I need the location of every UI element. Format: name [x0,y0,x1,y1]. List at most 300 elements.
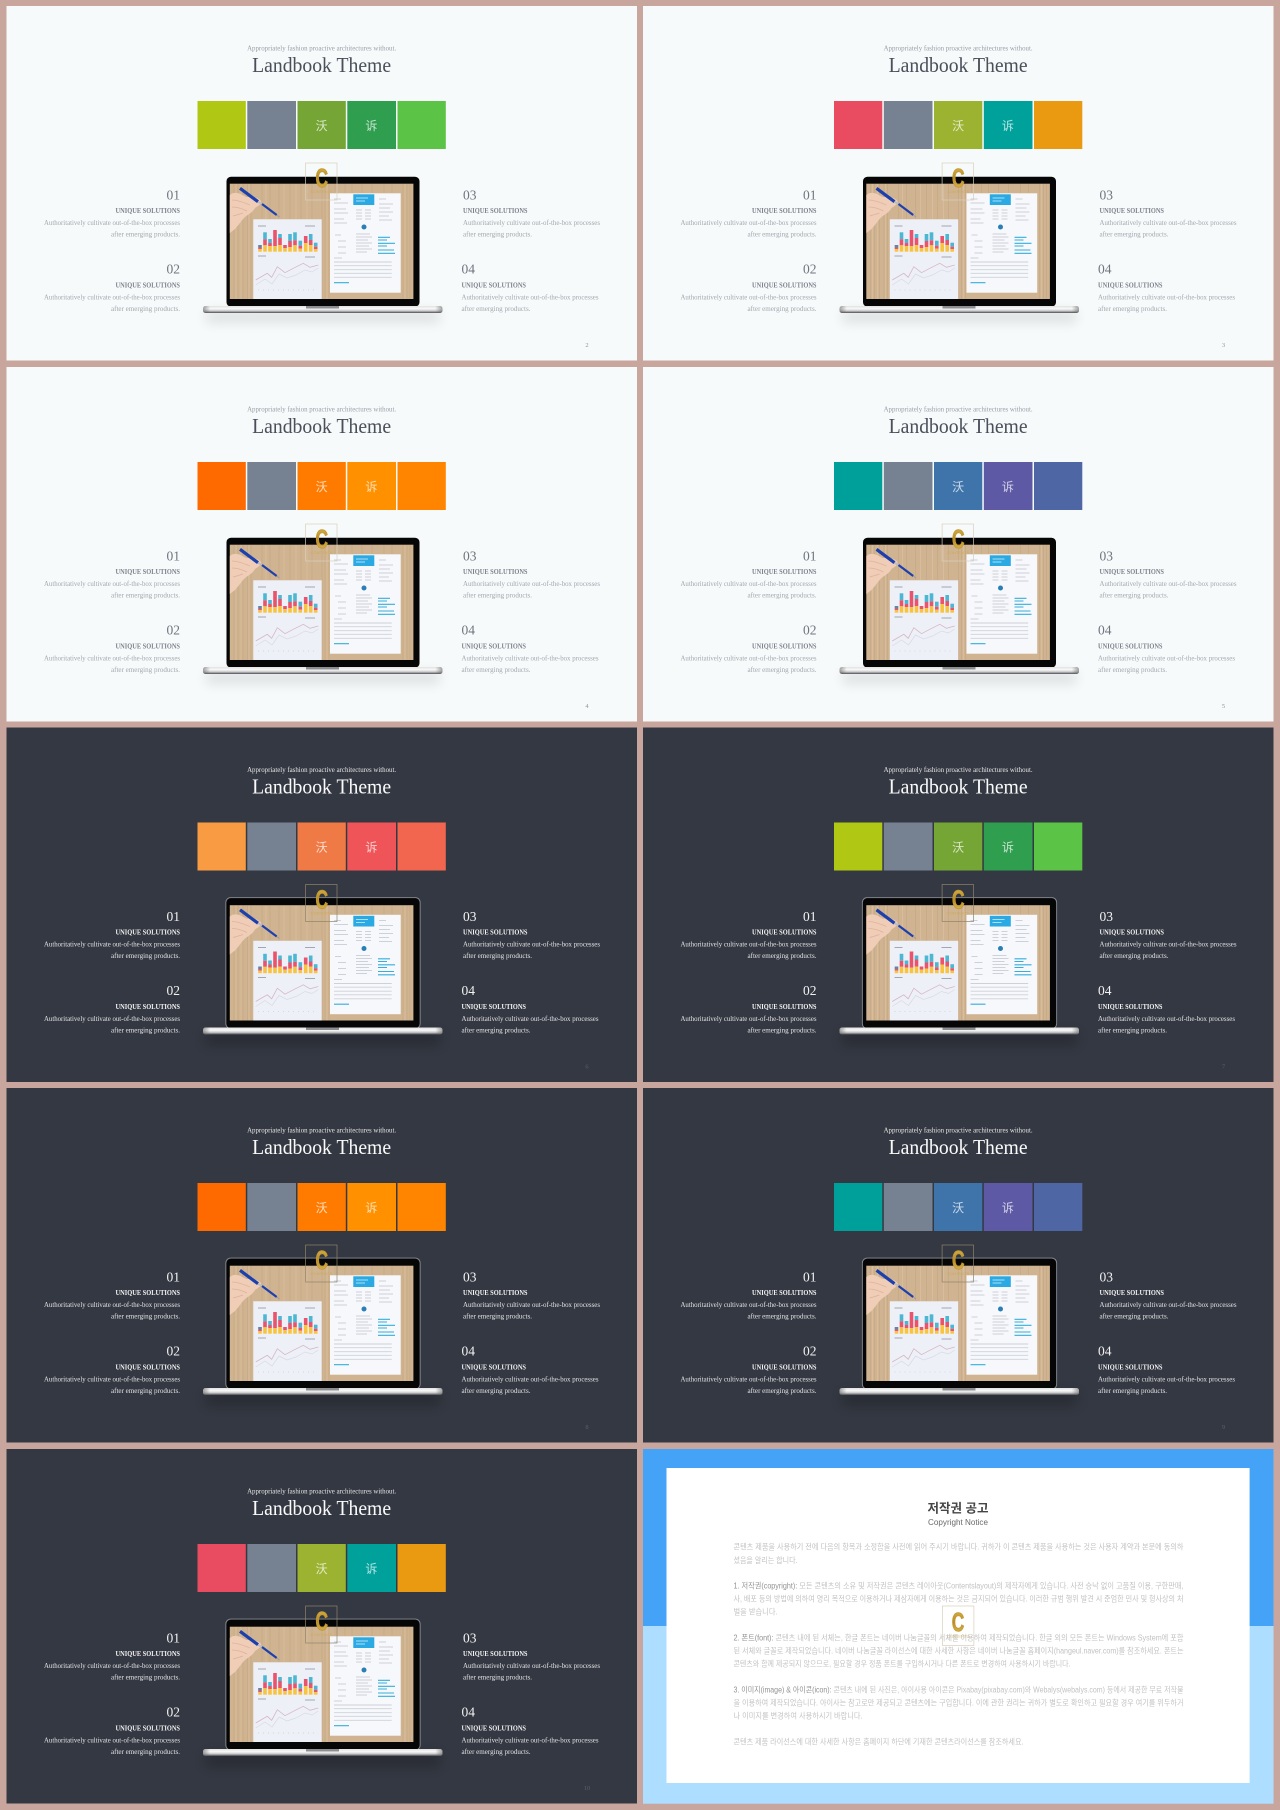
slide background [643,1088,1274,1442]
text block 01 [44,187,180,238]
text block 01: 01 [803,187,816,202]
text block 01: 01 [166,548,180,563]
text block 04: Authoritatively cultivate out-of-the-box processes [462,1375,599,1383]
text block 04: Authoritatively cultivate out-of-the-box processes [1098,1015,1235,1023]
text block 04: UNIQUE SOLUTIONS [462,1003,526,1011]
text block 01 [44,1269,180,1320]
text block 01: UNIQUE SOLUTIONS [752,928,817,936]
panel: slide 9 teal dark [643,1088,1274,1442]
slide background [643,367,1274,722]
watermark logo: CONTENTS [947,1271,969,1276]
text block 04: Authoritatively cultivate out-of-the-box processes [462,1015,599,1023]
text block 01: Authoritatively cultivate out-of-the-box processes [44,1662,180,1670]
slide background [643,6,1274,360]
color swatches [198,462,446,510]
watermark logo [306,163,337,200]
license note: 콘텐츠 제품 라이선스에 대한 사세한 사항은 홈페이지 하단에 기재한 콘텐츠라이선스를 참조하세요. [734,1737,1024,1747]
text block 02: after emerging products. [111,305,180,313]
text block 02: after emerging products. [111,666,180,674]
text block 02: after emerging products. [748,1026,817,1034]
color swatches: 沃 [952,119,964,133]
text block 02 [44,261,180,313]
text block 02: Authoritatively cultivate out-of-the-box processes [44,1736,180,1744]
color swatches: 沃 [316,840,328,854]
page number: 5 [1222,703,1225,710]
text block 01: UNIQUE SOLUTIONS [116,1650,180,1658]
text block 04 [462,1343,599,1395]
clause 3 image and icon: 나 이미지를 변경하여 사용하시기 바랍니다. [734,1711,862,1721]
watermark logo [306,884,337,922]
text block 01: 01 [166,1630,180,1645]
text block 01 [44,548,180,600]
text block 02: 02 [803,622,816,637]
intro paragraph: 콘텐츠 제품을 사용하기 전에 다음의 항목과 소정함을 사전에 읽어 주시기 바랍니다. 귀하가 이 콘텐츠 제품을 사용하는 것은 사용자 계약과 본문에 동의하 [734,1542,1184,1552]
text block 04: after emerging products. [1098,1387,1167,1395]
panel: copyright notice [643,1449,1274,1804]
text block 04: after emerging products. [1098,1026,1167,1034]
color swatches: 沃 [952,1201,964,1215]
text block 04 [462,622,599,674]
text block 01: 01 [166,187,180,202]
text block 03: 03 [463,1269,477,1284]
clause 2 font [734,1633,1184,1668]
watermark logo: CONTENTS [311,550,333,555]
color swatches: 诉 [1002,119,1014,133]
white notice card [666,1468,1250,1783]
text block 03: Authoritatively cultivate out-of-the-box processes [1100,1301,1237,1309]
text block 02: Authoritatively cultivate out-of-the-box processes [680,293,817,301]
page number: 6 [585,1064,589,1070]
text block 03: after emerging products. [463,1674,532,1682]
watermark logo [306,524,337,561]
text block 04: UNIQUE SOLUTIONS [462,642,526,650]
text block 01: Authoritatively cultivate out-of-the-box processes [44,940,180,948]
text block 04 [1098,622,1235,674]
notice heading: 저작권 공고 [928,1500,988,1516]
watermark logo: CONTENTS [311,189,333,194]
panel: slide 7 green dark [643,728,1274,1082]
text block 01: Authoritatively cultivate out-of-the-box processes [680,219,817,227]
clause 2 font: 2. 폰트(font): 콘텐츠 내에 된 서체는, 한글 폰트는 네이버 나눔글꼴의 서체를 이용하여 제작되었습니다. 한글 외의 모든 폰트는 Windows System에 포함 [734,1633,1184,1643]
color swatches [198,1183,446,1231]
watermark logo: CONTENTS [311,910,333,916]
text block 03 [1100,909,1237,960]
subtitle: Appropriately fashion proactive architectures without. [247,765,396,774]
text block 04: UNIQUE SOLUTIONS [1098,281,1163,289]
slide background [6,1449,637,1804]
clause 1 copyright: 사, 배포 등의 방법에 의하여 영리 목적으로 이용하거나 제삼자에게 이용하는 것은 금지되어 있습니다. 이러한 규범 행위 발견 시 준엄한 민사 및 형사상의 처 [734,1593,1184,1603]
watermark logo: C [952,1607,964,1637]
text block 03: UNIQUE SOLUTIONS [463,928,528,936]
laptop mockup [840,177,1079,323]
text block 02 [680,261,817,313]
panel: slide 4 orange light [6,367,637,722]
text block 03: after emerging products. [1100,1312,1169,1320]
text block 02 [680,622,817,674]
text block 03: 03 [463,548,477,563]
clause 3 image and icon [734,1684,1184,1721]
color swatches [834,101,1082,149]
text block 03: 03 [463,187,477,202]
laptop mockup [203,898,442,1044]
text block 02: after emerging products. [111,1026,180,1034]
text block 04: 04 [462,261,475,276]
text block 04: after emerging products. [462,1026,531,1034]
text block 02: UNIQUE SOLUTIONS [116,1724,180,1732]
watermark logo [942,524,974,561]
text block 04: Authoritatively cultivate out-of-the-box processes [462,1736,599,1744]
text block 01: after emerging products. [748,592,817,600]
watermark logo [942,1606,974,1646]
color swatches: 沃 [316,480,328,494]
clause 1 copyright [734,1581,1184,1617]
text block 04: 04 [462,1704,475,1719]
text block 02: UNIQUE SOLUTIONS [116,281,180,289]
text block 04: 04 [1098,622,1112,637]
text block 01: after emerging products. [748,952,817,960]
color swatches: 沃 [316,119,328,133]
text block 04: after emerging products. [462,305,531,313]
text block 04: 04 [462,622,475,637]
title: Landbook Theme [252,1135,391,1159]
clause 2 font: 콘텐츠와 함께 제공되지 않으므로, 필요할 경우 정품 폰트를 구입하시거나 다른 폰트로 변경하여 사용하시기 바랍니다. [734,1658,1070,1668]
text block 01 [680,1269,817,1320]
text block 01: UNIQUE SOLUTIONS [116,928,180,936]
subtitle: Appropriately fashion proactive architectures without. [247,44,396,53]
text block 04: Authoritatively cultivate out-of-the-box processes [1098,1375,1235,1383]
text block 03: after emerging products. [1100,952,1169,960]
watermark logo: C [952,524,965,554]
laptop mockup [840,1258,1079,1405]
color swatches [834,822,1082,870]
page number: 3 [1222,342,1225,349]
text block 03: UNIQUE SOLUTIONS [1100,928,1164,936]
text block 02: UNIQUE SOLUTIONS [752,1003,817,1011]
text block 03: Authoritatively cultivate out-of-the-box processes [463,219,600,227]
clause 1 copyright: 벌을 받습니다. [734,1607,778,1617]
clause 3 image and icon: 을 이용하여 제작되었습니다. 아이사는 참고로만 제공되고 콘텐츠에는 구입합니다. 이에 관한 권리는 귀하가 별도로 확인하고 필요할 경우 여기를 위두하거 [734,1697,1184,1707]
text block 03: Authoritatively cultivate out-of-the-box processes [463,1662,600,1670]
slide background [643,728,1274,1082]
panel: slide 2 green light [6,6,637,360]
text block 02 [44,1343,180,1395]
text block 01: after emerging products. [111,1312,180,1320]
text block 04 [462,983,599,1034]
text block 01: UNIQUE SOLUTIONS [752,1289,817,1297]
page number: 10 [584,1785,590,1792]
text block 03 [1100,1269,1237,1320]
text block 03: 03 [1100,1269,1113,1284]
text block 02: Authoritatively cultivate out-of-the-box processes [44,1375,180,1383]
text block 03: Authoritatively cultivate out-of-the-box processes [463,580,600,588]
text block 04: Authoritatively cultivate out-of-the-box processes [1098,293,1235,301]
text block 04: 04 [462,983,475,998]
intro paragraph [734,1542,1184,1565]
watermark logo: C [316,1245,328,1275]
text block 02: after emerging products. [748,1387,817,1395]
color swatches: 诉 [365,119,377,133]
subtitle: Appropriately fashion proactive architectures without. [247,405,396,414]
text block 03 [463,1630,600,1682]
text block 02: Authoritatively cultivate out-of-the-box processes [44,654,180,662]
text block 03 [463,187,600,238]
panel: slide 6 coral dark [6,728,637,1082]
text block 02: UNIQUE SOLUTIONS [116,1003,180,1011]
watermark logo: C [316,163,328,193]
color swatches: 诉 [1002,480,1014,494]
text block 02: Authoritatively cultivate out-of-the-box processes [680,1375,817,1383]
watermark logo: CONTENTS [311,1632,333,1637]
text block 01: Authoritatively cultivate out-of-the-box processes [680,940,817,948]
text block 03: UNIQUE SOLUTIONS [1100,1289,1164,1297]
color swatches [834,1183,1082,1231]
text block 03: UNIQUE SOLUTIONS [463,568,528,576]
text block 04: UNIQUE SOLUTIONS [1098,642,1163,650]
text block 04 [1098,983,1235,1034]
panel: slide 5 teal light [643,367,1274,722]
text block 01: Authoritatively cultivate out-of-the-box processes [680,1301,817,1309]
text block 04: Authoritatively cultivate out-of-the-box processes [462,654,599,662]
text block 04: 04 [1098,1343,1112,1358]
subtitle: Appropriately fashion proactive architectures without. [247,1126,396,1135]
text block 03: Authoritatively cultivate out-of-the-box processes [1100,940,1237,948]
text block 04 [462,261,599,313]
text block 03: UNIQUE SOLUTIONS [463,207,528,215]
text block 02: after emerging products. [111,1748,180,1756]
page number: 2 [585,342,589,349]
color swatches: 沃 [316,1201,328,1215]
watermark logo: CONTENTS [311,1271,333,1276]
text block 04: Authoritatively cultivate out-of-the-box processes [462,293,599,301]
color swatches: 诉 [365,1562,377,1576]
text block 03 [463,548,600,600]
text block 04: after emerging products. [462,666,531,674]
notice subheading: Copyright Notice [928,1517,988,1527]
text block 04: UNIQUE SOLUTIONS [1098,1363,1163,1371]
text block 03: UNIQUE SOLUTIONS [1100,568,1164,576]
text block 04: Authoritatively cultivate out-of-the-box processes [1098,654,1235,662]
watermark logo: C [316,524,328,554]
clause 1 copyright: 1. 저작권(copyright): 모든 콘텐츠의 소유 및 저작권은 콘텐츠 레이아웃(Contentslayout)의 제작자에게 있습니다. 사전 승낙 없이 고품질 이용, 구한판매, [734,1581,1184,1591]
watermark logo: CONTENTS [947,189,969,194]
text block 02: 02 [803,261,816,276]
text block 03: UNIQUE SOLUTIONS [463,1289,528,1297]
text block 01: 01 [803,909,816,924]
text block 02: UNIQUE SOLUTIONS [752,281,817,289]
color swatches: 沃 [952,480,964,494]
text block 02: UNIQUE SOLUTIONS [752,1363,817,1371]
text block 01: 01 [166,909,180,924]
color swatches: 诉 [365,480,377,494]
text block 02 [44,622,180,674]
text block 04: after emerging products. [1098,305,1167,313]
text block 03: 03 [463,909,477,924]
subtitle: Appropriately fashion proactive architectures without. [884,44,1033,53]
text block 01 [44,909,180,960]
subtitle: Appropriately fashion proactive architectures without. [884,765,1033,774]
slide background [6,1088,637,1442]
watermark logo: CONTENTS [947,910,969,916]
text block 03: Authoritatively cultivate out-of-the-box processes [463,940,600,948]
watermark logo [306,1245,337,1282]
text block 03 [463,909,600,960]
text block 03 [463,1269,600,1320]
text block 01: after emerging products. [111,952,180,960]
text block 04: after emerging products. [1098,666,1167,674]
text block 02: 02 [166,261,180,276]
clause 3 image and icon: 3. 이미지(image) & 아이콘(icon): 콘텐츠 내에 된 사진은, 아이사용 아이콘은 Pixabay(pixabay.com)와 Webalys(webalys.com) 등에서 제공한 무료 저작물 [734,1684,1184,1694]
text block 01: after emerging products. [748,1312,817,1320]
laptop mockup [840,898,1079,1044]
color swatches [198,1544,446,1592]
slide background [6,728,637,1082]
intro paragraph: 셨음을 알리는 합니다. [734,1555,798,1565]
color swatches [834,462,1082,510]
laptop mockup [203,177,442,323]
text block 03 [1100,187,1237,238]
text block 03: after emerging products. [1100,592,1169,600]
text block 03: after emerging products. [463,592,532,600]
color swatches: 诉 [365,840,377,854]
text block 03: Authoritatively cultivate out-of-the-box processes [1100,219,1237,227]
title: Landbook Theme [889,53,1028,77]
text block 03: 03 [1100,187,1113,202]
panel: slide 3 red light [643,6,1274,360]
text block 02: 02 [166,622,180,637]
watermark logo: C [316,1606,328,1636]
laptop mockup [840,538,1079,684]
text block 02: Authoritatively cultivate out-of-the-box processes [44,1015,180,1023]
watermark logo: C [952,163,965,193]
text block 01: Authoritatively cultivate out-of-the-box processes [44,1301,180,1309]
text block 04: 04 [1098,261,1112,276]
panel: slide 8 orange dark [6,1088,637,1442]
text block 03: after emerging products. [1100,230,1169,238]
laptop mockup [203,538,442,684]
title: Landbook Theme [889,1135,1028,1159]
text block 04: 04 [462,1343,475,1358]
text block 01 [44,1630,180,1682]
page number: 7 [1222,1064,1226,1070]
text block 01: UNIQUE SOLUTIONS [116,1289,180,1297]
text block 04: UNIQUE SOLUTIONS [462,1724,526,1732]
subtitle: Appropriately fashion proactive architectures without. [884,405,1033,414]
text block 02: Authoritatively cultivate out-of-the-box processes [680,654,817,662]
text block 03: after emerging products. [463,952,532,960]
text block 02: Authoritatively cultivate out-of-the-box processes [680,1015,817,1023]
text block 01 [680,548,817,600]
text block 01: 01 [166,1269,180,1284]
watermark logo: CONTENTS [947,550,969,555]
text block 02 [44,1704,180,1756]
text block 01: after emerging products. [748,230,817,238]
watermark logo [306,1606,337,1643]
text block 01: after emerging products. [111,592,180,600]
text block 01 [680,187,817,238]
text block 02 [44,983,180,1034]
text block 04 [462,1704,599,1756]
text block 01: UNIQUE SOLUTIONS [116,207,180,215]
watermark logo: C [316,884,328,914]
text block 03 [1100,548,1237,600]
text block 01: Authoritatively cultivate out-of-the-box processes [44,219,180,227]
color swatches: 诉 [1002,840,1014,854]
text block 04: UNIQUE SOLUTIONS [1098,1003,1163,1011]
text block 04: UNIQUE SOLUTIONS [462,281,526,289]
color swatches: 沃 [316,1562,328,1576]
color swatches [198,822,446,870]
text block 02: after emerging products. [748,666,817,674]
watermark logo [942,1245,974,1282]
text block 01: 01 [803,548,816,563]
page number: 4 [585,703,589,710]
clause 2 font: 된 서체와 글꼴로 제작되었습니다. 네이버 나눔글꼴 라이선스에 대한 사세한 사항은 네이버 나눔글꼴 홈페이지(hangeul.naver.com)를 참조하세요. 폰트는 [734,1645,1184,1655]
laptop mockup [203,1258,442,1405]
text block 03: 03 [1100,548,1113,563]
title: Landbook Theme [252,53,391,77]
title: Landbook Theme [252,1496,391,1520]
subtitle: Appropriately fashion proactive architectures without. [247,1487,396,1496]
text block 02 [680,983,817,1034]
watermark logo: C [952,1245,965,1275]
text block 03: 03 [463,1630,477,1645]
title: Landbook Theme [252,414,391,438]
text block 01: UNIQUE SOLUTIONS [116,568,180,576]
text block 02: after emerging products. [111,1387,180,1395]
text block 02: 02 [803,983,816,998]
color swatches [198,101,446,149]
text block 04: UNIQUE SOLUTIONS [462,1363,526,1371]
page number: 9 [1222,1424,1225,1431]
text block 04: after emerging products. [462,1387,531,1395]
slide background [6,6,637,360]
subtitle: Appropriately fashion proactive architectures without. [884,1126,1033,1135]
text block 01: after emerging products. [111,230,180,238]
slide background [6,367,637,722]
text block 02: 02 [166,1704,180,1719]
text block 01: after emerging products. [111,1674,180,1682]
title: Landbook Theme [889,774,1028,798]
text block 04 [1098,261,1235,313]
text block 01 [680,909,817,960]
light blue lower background [643,1626,1274,1804]
watermark logo [942,884,974,922]
text block 03: UNIQUE SOLUTIONS [463,1650,528,1658]
color swatches: 诉 [365,1201,377,1215]
text block 01: Authoritatively cultivate out-of-the-box processes [680,580,817,588]
text block 03: Authoritatively cultivate out-of-the-box processes [1100,580,1237,588]
text block 02: 02 [803,1343,816,1358]
text block 01: UNIQUE SOLUTIONS [752,207,817,215]
text block 02: after emerging products. [748,305,817,313]
text block 01: 01 [803,1269,816,1284]
watermark logo: C [952,884,965,914]
laptop mockup [203,1619,442,1766]
text block 01: UNIQUE SOLUTIONS [752,568,817,576]
text block 02: UNIQUE SOLUTIONS [116,1363,180,1371]
color swatches: 沃 [952,840,964,854]
watermark logo [942,163,974,200]
text block 03: after emerging products. [463,230,532,238]
blue upper background [643,1449,1274,1626]
text block 02: 02 [166,983,180,998]
text block 03: after emerging products. [463,1312,532,1320]
text block 04: after emerging products. [462,1748,531,1756]
text block 02: 02 [166,1343,180,1358]
text block 02: UNIQUE SOLUTIONS [752,642,817,650]
text block 03: 03 [1100,909,1113,924]
text block 03: UNIQUE SOLUTIONS [1100,207,1164,215]
